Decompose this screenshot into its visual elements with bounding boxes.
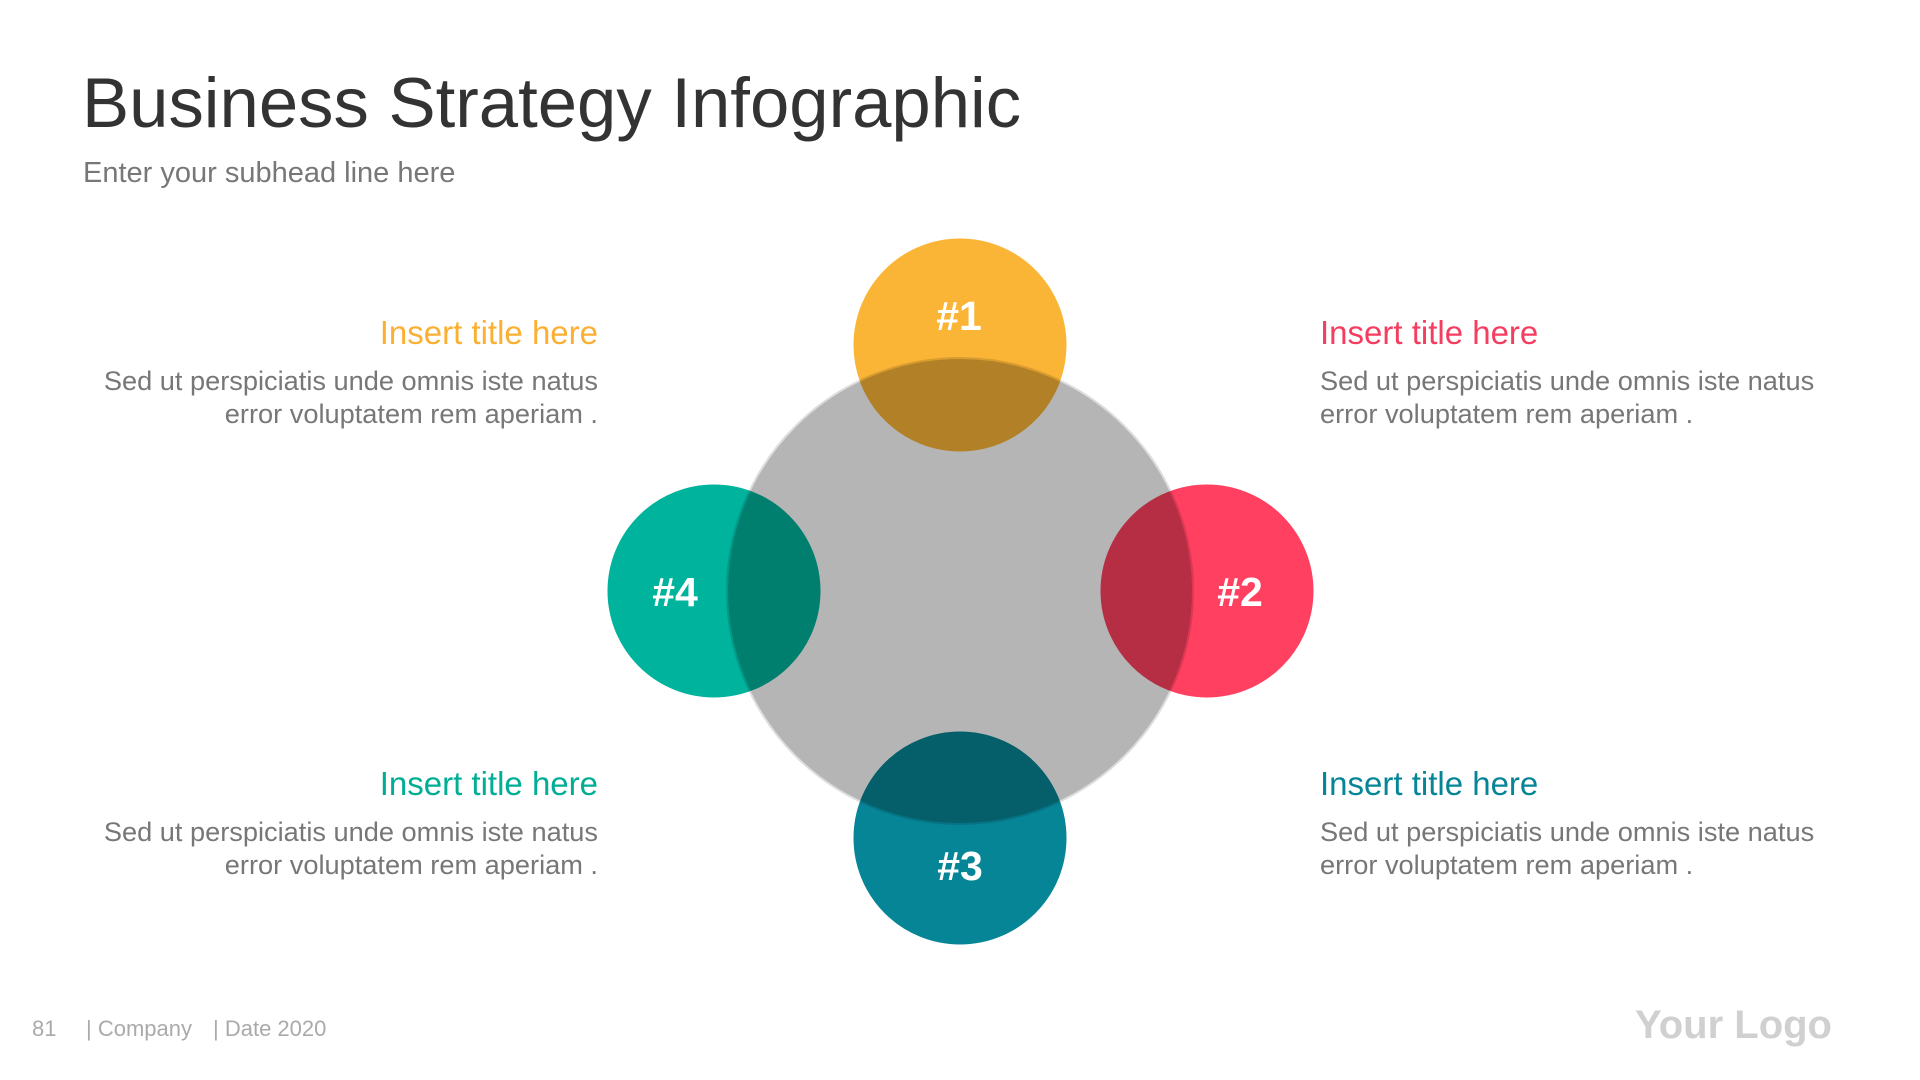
text block 4: Sed ut perspiciatis unde omnis iste natus [104, 816, 598, 847]
logo: Your Logo [1635, 1003, 1832, 1047]
text block 4 [104, 765, 598, 880]
text block 4: Insert title here [380, 765, 598, 802]
text block 3: error voluptatem rem aperiam . [1320, 849, 1693, 880]
subhead: Enter your subhead line here [83, 157, 455, 189]
number labels: #4 [652, 569, 698, 615]
text block 1: error voluptatem rem aperiam . [225, 398, 598, 429]
circle #4 [606, 483, 822, 699]
text block 4: error voluptatem rem aperiam . [225, 849, 598, 880]
footer: | Date 2020 [213, 1016, 326, 1041]
text block 2: error voluptatem rem aperiam . [1320, 398, 1693, 429]
text block 2 [1320, 314, 1814, 429]
title: Business Strategy Infographic [82, 63, 1021, 142]
circle #3 [852, 730, 1068, 946]
text block 3: Insert title here [1320, 765, 1538, 802]
text block 2: Sed ut perspiciatis unde omnis iste natus [1320, 365, 1814, 396]
footer: 81 [32, 1016, 56, 1041]
number labels: #3 [937, 843, 983, 889]
number labels [652, 293, 1263, 889]
circle #1 [852, 237, 1068, 453]
central gray circle [727, 358, 1193, 824]
number labels: #2 [1217, 569, 1263, 615]
text block 2: Insert title here [1320, 314, 1538, 351]
number labels: #1 [936, 293, 982, 339]
footer: | Company [86, 1016, 192, 1041]
text block 1 [104, 314, 598, 429]
text block 1: Sed ut perspiciatis unde omnis iste natus [104, 365, 598, 396]
circle #2 [1099, 483, 1315, 699]
text block 1: Insert title here [380, 314, 598, 351]
footer [32, 1016, 326, 1041]
text block 3: Sed ut perspiciatis unde omnis iste natus [1320, 816, 1814, 847]
text block 3 [1320, 765, 1814, 880]
